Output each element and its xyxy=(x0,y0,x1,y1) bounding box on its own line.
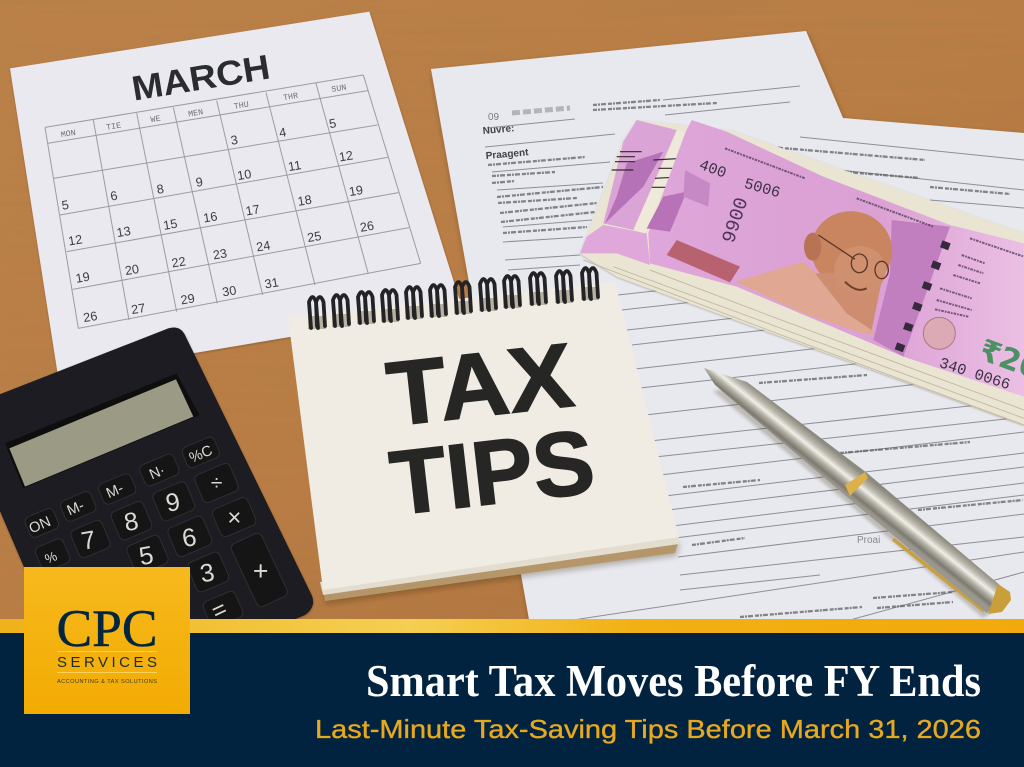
pen gold ring xyxy=(845,472,868,496)
note stack edge xyxy=(580,120,1024,425)
weekday labels: TIE xyxy=(105,121,122,133)
form field labels: Praagent xyxy=(485,147,530,162)
panel: tax form sheets xyxy=(431,31,1024,638)
date numbers: 5 xyxy=(61,198,70,213)
serial number: 400 xyxy=(697,156,729,182)
form field labels: 09 xyxy=(488,112,500,123)
pen clip xyxy=(893,539,984,611)
panel: CPC Services logo xyxy=(24,567,190,714)
logo tagline: ACCOUNTING & TAX SOLUTIONS xyxy=(57,679,157,685)
date numbers: 5 xyxy=(328,116,337,131)
date numbers: 13 xyxy=(116,224,132,240)
key labels: N· xyxy=(147,463,168,483)
date numbers: 31 xyxy=(264,275,280,291)
front note xyxy=(648,120,1024,397)
date numbers: 26 xyxy=(82,309,98,325)
seal xyxy=(923,317,955,349)
date numbers: 20 xyxy=(124,262,140,278)
panel: navy footer banner xyxy=(0,633,1024,767)
calculator display xyxy=(5,373,199,488)
date numbers: 25 xyxy=(306,229,322,245)
date numbers: 10 xyxy=(236,167,252,183)
date numbers: 26 xyxy=(359,219,375,235)
date numbers: 15 xyxy=(162,217,178,233)
panel: stack of rupee notes xyxy=(580,120,1024,425)
calendar heading: MARCH xyxy=(129,49,273,109)
date numbers: 4 xyxy=(278,125,287,140)
weekday labels: SUN xyxy=(331,83,347,95)
date numbers: 12 xyxy=(67,232,83,248)
date numbers: 17 xyxy=(245,202,261,218)
date numbers: 8 xyxy=(156,182,165,197)
panel: March calendar sheet xyxy=(10,12,462,376)
date numbers: 23 xyxy=(212,246,228,262)
key labels: ÷ xyxy=(211,471,223,495)
title text: TIPS xyxy=(385,411,599,535)
panel: black calculator xyxy=(0,327,313,629)
Gandhi portrait xyxy=(735,202,901,335)
key labels: 3 xyxy=(198,558,217,588)
date numbers: 11 xyxy=(287,158,302,174)
date numbers: 29 xyxy=(180,291,196,307)
gold accent strip xyxy=(0,619,1024,633)
date numbers: 18 xyxy=(297,193,313,209)
form field labels: Nuvre: xyxy=(482,123,515,137)
colour strip xyxy=(667,240,740,282)
weekday labels: MON xyxy=(60,128,77,140)
serial number: 340 0066 xyxy=(937,354,1012,394)
form field labels: Proai xyxy=(857,535,880,546)
logo dividers xyxy=(57,652,157,672)
key labels: + xyxy=(253,556,268,586)
date numbers: 19 xyxy=(348,183,364,199)
date numbers: 19 xyxy=(75,270,91,286)
date numbers: 9 xyxy=(195,175,204,190)
pen barrel xyxy=(704,368,1008,613)
date numbers: 22 xyxy=(171,254,187,270)
weekday labels: MEN xyxy=(187,107,204,120)
date numbers: 24 xyxy=(255,238,271,254)
security marks xyxy=(895,240,951,352)
date numbers xyxy=(61,116,375,325)
weekday labels: THU xyxy=(233,100,250,112)
dark pink panel xyxy=(873,220,950,357)
panel: spiral notebook xyxy=(288,268,679,601)
key labels: 6 xyxy=(180,523,199,553)
vertical serial: 9900 xyxy=(718,195,753,246)
title text: TAX xyxy=(382,325,578,446)
panel: silver pen xyxy=(704,368,1011,618)
logo wordmark: CPC xyxy=(56,600,158,658)
key labels: M- xyxy=(65,498,87,519)
date numbers: 6 xyxy=(109,189,119,204)
rear note xyxy=(580,120,687,265)
key labels: 5 xyxy=(137,541,156,571)
serial number: 5006 xyxy=(742,175,782,202)
banner headline: Smart Tax Moves Before FY Ends xyxy=(366,656,981,706)
key labels: 8 xyxy=(122,507,141,537)
logo services: SERVICES xyxy=(57,654,157,671)
key labels: % xyxy=(43,548,59,567)
key labels xyxy=(27,443,268,626)
weekday labels xyxy=(60,83,347,140)
key labels: 9 xyxy=(164,488,182,518)
spiral binding xyxy=(308,268,599,329)
note fine print xyxy=(725,148,1024,317)
key labels: = xyxy=(207,595,232,626)
date numbers: 16 xyxy=(202,209,218,225)
banner subtitle: Last-Minute Tax-Saving Tips Before March 31, 2026 xyxy=(315,714,981,744)
title text xyxy=(382,325,599,535)
key labels: %C xyxy=(187,443,215,467)
form field labels xyxy=(482,112,880,546)
key labels: M- xyxy=(104,481,126,502)
date numbers: 12 xyxy=(338,148,354,164)
calendar grid xyxy=(45,75,421,328)
key labels: × xyxy=(227,505,241,532)
key labels: ON xyxy=(27,514,53,537)
key labels: 7 xyxy=(79,526,98,556)
date numbers: 30 xyxy=(221,283,237,299)
weekday labels: THR xyxy=(282,91,299,103)
calculator keys xyxy=(23,435,289,629)
date numbers: 3 xyxy=(230,133,239,148)
pen end cap xyxy=(988,584,1011,614)
date numbers: 27 xyxy=(130,301,146,317)
weekday labels: WE xyxy=(150,114,161,125)
